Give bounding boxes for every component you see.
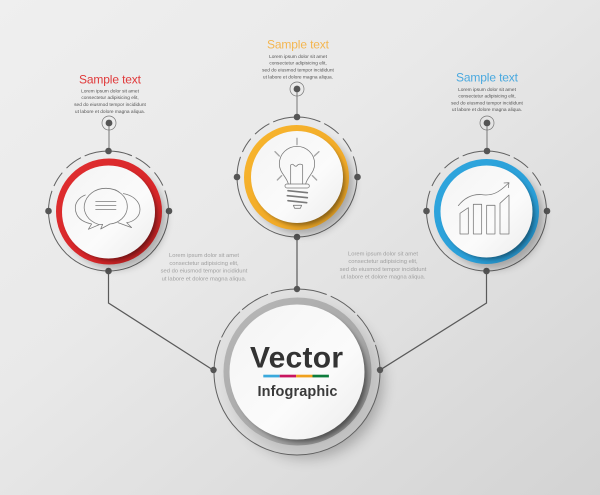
text block: right description: consectetur adipisicing elit, — [458, 94, 516, 100]
heading: middle sample text: Sample text — [267, 37, 330, 51]
text block: left center note: consectetur adipisicing elit, — [169, 261, 239, 267]
panel: right node (growth) — [423, 71, 550, 274]
disc: blue — [434, 159, 544, 269]
text block: right center note: sed do eiusmod tempor incididunt — [340, 267, 427, 273]
panel: middle node (idea) — [234, 37, 361, 240]
text block: left description: Lorem ipsum dolor sit amet — [81, 88, 140, 94]
heading: right sample text: Sample text — [456, 71, 519, 85]
dashed ring: left — [45, 148, 172, 274]
text block: left center note — [161, 253, 248, 283]
text block: middle description: ut labore et dolore magna aliqua. — [263, 74, 333, 80]
shadow and dashed ring: center — [210, 286, 383, 458]
icon: speech bubbles — [75, 188, 140, 229]
top pin: right — [480, 116, 494, 151]
panel: center node — [210, 286, 383, 458]
dashed ring: right — [423, 148, 550, 274]
text block: left center note: ut labore et dolore magna aliqua. — [162, 277, 247, 283]
icon: bar chart with rising arrow — [458, 183, 509, 234]
text block: left center note: Lorem ipsum dolor sit amet — [169, 253, 239, 259]
color bar — [263, 375, 329, 377]
text block: middle description: Lorem ipsum dolor sit amet — [269, 54, 328, 60]
top pin: left — [102, 116, 116, 151]
heading: left sample text: Sample text — [79, 72, 142, 86]
text block: left center note: sed do eiusmod tempor incididunt — [161, 269, 248, 275]
panel: left node (speech) — [45, 72, 172, 274]
text block: left description: ut labore et dolore magna aliqua. — [75, 109, 145, 115]
connector: right node to center node — [380, 271, 486, 370]
icon: light bulb — [275, 138, 319, 208]
text block: middle description: consectetur adipisicing elit, — [269, 61, 327, 67]
text block: right description: Lorem ipsum dolor sit amet — [458, 87, 517, 93]
text block: right description: sed do eiusmod tempor incididunt — [451, 100, 524, 106]
text block: left description: consectetur adipisicing elit, — [81, 95, 139, 101]
text block: right center note — [340, 252, 427, 281]
disc: red — [56, 158, 166, 269]
text block: right center note: consectetur adipisicing elit, — [348, 259, 418, 265]
top pin: middle — [290, 82, 304, 117]
text block: left description: sed do eiusmod tempor incididunt — [74, 102, 147, 108]
disc: grey — [224, 298, 372, 446]
title: Vector: Vector — [250, 341, 343, 374]
subtitle: Infographic: Infographic — [258, 384, 338, 400]
text block: right description — [451, 87, 524, 113]
connector: middle node to center node — [296, 237, 298, 289]
text block: middle description: sed do eiusmod tempor incididunt — [262, 67, 335, 73]
connector: left node to center node — [108, 271, 213, 370]
text block: right center note: ut labore et dolore magna aliqua. — [341, 275, 426, 281]
text block: left description — [74, 88, 147, 115]
text block: right center note: Lorem ipsum dolor sit amet — [348, 252, 418, 258]
text block: middle description — [262, 54, 335, 80]
dashed ring: middle — [234, 114, 361, 240]
disc: yellow — [244, 125, 354, 235]
text block: right description: ut labore et dolore magna aliqua. — [452, 107, 522, 113]
